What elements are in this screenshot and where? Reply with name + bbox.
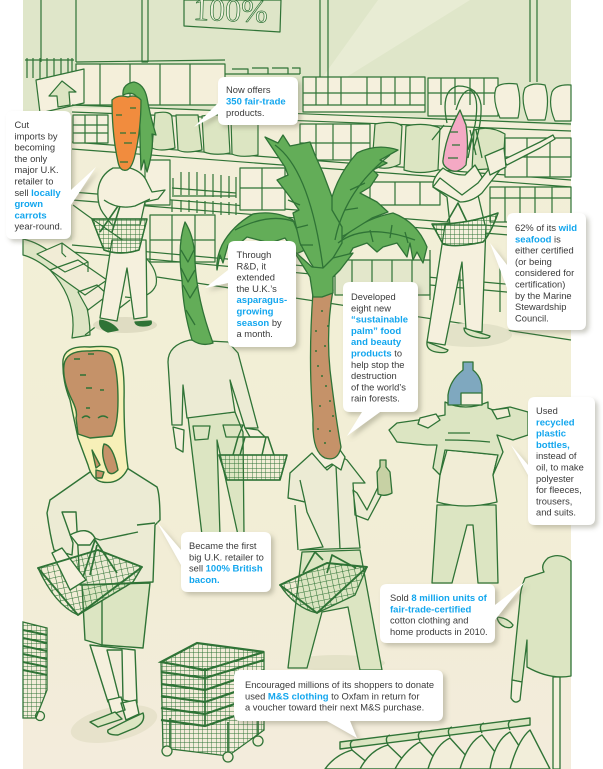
bacon head (63, 346, 128, 482)
shopper with recycled bottle head (389, 362, 528, 628)
upper left frond (265, 135, 342, 280)
basket (92, 219, 147, 253)
callout: fair-trade clothing: home products in 2010. (390, 627, 488, 637)
left arc frond (217, 213, 305, 270)
callout: carrots: the only (14, 154, 48, 164)
callout: wild seafood: seafood is (515, 234, 561, 245)
callout: recycled plastic bottles: polyester (536, 474, 574, 484)
fourth row (150, 215, 215, 262)
callout: fair-trade clothing: Sold 8 million units of (390, 593, 487, 604)
callout: wild seafood: considered for (515, 268, 574, 278)
callout: sustainable palm: destruction (351, 371, 397, 381)
callout: fair-trade clothing (380, 582, 525, 643)
callout: wild seafood: 62% of its wild (515, 223, 577, 234)
callout: recycled plastic bottles: trousers, (536, 496, 572, 506)
callout: carrots (6, 111, 96, 239)
top row boxes left (76, 60, 225, 105)
callout: sustainable palm: and beauty (351, 337, 402, 348)
top row boxes right (303, 77, 425, 112)
callout: British bacon: Became the first (189, 541, 257, 551)
callout: fair-trade products: 350 fair-trade (226, 96, 286, 108)
callout: sustainable palm: rain forests. (351, 394, 400, 404)
callout: asparagus: Through (236, 250, 271, 260)
callout: carrots: carrots (14, 210, 47, 221)
arrow sign (36, 69, 84, 113)
callout: sustainable palm: palm” food (351, 326, 401, 337)
callout: recycled plastic bottles: instead of (536, 451, 577, 461)
callout: sustainable palm: Developed (351, 292, 396, 302)
callout: recycled plastic bottles: recycled (536, 417, 575, 428)
shopper with bacon head (38, 346, 161, 750)
callout: wild seafood (490, 213, 586, 330)
callout: sustainable palm: “sustainable (351, 315, 408, 326)
callout: recycled plastic bottles: for fleeces, (536, 485, 582, 495)
shrimp head (443, 110, 468, 171)
frond base (293, 250, 353, 297)
callout: sustainable palm: eight new (351, 303, 391, 313)
upper right frond (328, 147, 398, 240)
callout: carrots: sell locally (14, 188, 61, 199)
callout: asparagus: asparagus- (236, 295, 287, 306)
basket (38, 550, 142, 615)
mannequin (511, 556, 571, 769)
callout: British bacon: big U.K. retailer to (189, 552, 264, 562)
callout: sustainable palm: products to (351, 348, 402, 360)
store shelves background (23, 0, 571, 340)
callout: M&S clothing: Encouraged millions of its shoppers to donate (245, 680, 434, 690)
callout: wild seafood: Stewardship (515, 302, 566, 312)
callout: carrots: grown (14, 199, 43, 210)
palm trunk and face (310, 290, 341, 459)
callout: recycled plastic bottles: bottles, (536, 440, 570, 451)
callout: M&S clothing (234, 670, 443, 738)
callout: sustainable palm (343, 282, 418, 436)
callout: asparagus: season by (236, 318, 282, 329)
callout: wild seafood: (or being (515, 257, 552, 267)
basket (280, 563, 367, 613)
callout: M&S clothing: used M&S clothing to Oxfam in return for (245, 691, 419, 702)
callout: recycled plastic bottles: oil, to make (536, 462, 584, 472)
shopper with asparagus head (168, 222, 287, 535)
carrot head (112, 96, 141, 170)
basket (432, 213, 498, 246)
callout: recycled plastic bottles (511, 397, 595, 525)
callout: fair-trade clothing: cotton clothing and (390, 616, 468, 626)
callout: carrots: becoming (14, 143, 55, 153)
callout: asparagus: extended (236, 273, 275, 283)
shelf boards (72, 105, 571, 298)
callout: fair-trade products: products. (226, 108, 264, 118)
callout: asparagus: growing (236, 306, 274, 318)
callout: asparagus: a month. (236, 329, 273, 339)
callout: fair-trade clothing: fair-trade-certified (390, 604, 471, 615)
shopper with shrimp head (427, 86, 555, 353)
callout: asparagus: R&D, it (236, 261, 266, 271)
callout: carrots: Cut (14, 120, 29, 130)
callout: sustainable palm: of the world’s (351, 382, 406, 392)
clothes rack (325, 718, 550, 769)
third row (145, 160, 285, 210)
callout: fair-trade products: Now offers (226, 85, 271, 95)
callout: British bacon: sell 100% British (189, 564, 263, 575)
callout: asparagus (205, 241, 296, 347)
palm fronds (217, 135, 427, 297)
right arc frond (327, 213, 427, 277)
shopper with carrot head (92, 82, 165, 333)
callout: wild seafood: certification) (515, 280, 565, 290)
callout: carrots: retailer to (14, 176, 53, 186)
basket stack left (23, 622, 47, 720)
callout: carrots: year-round. (14, 222, 62, 232)
callout: recycled plastic bottles: plastic (536, 429, 566, 440)
callout: British bacon: bacon. (189, 575, 220, 586)
callout: carrots: major U.K. (14, 165, 59, 175)
basket stack centre (161, 643, 264, 762)
shopper with palm tree head (217, 135, 427, 671)
callout: fair-trade products (194, 77, 298, 127)
callout: British bacon (157, 522, 271, 592)
basket (219, 455, 287, 480)
callout: wild seafood: Council. (515, 313, 549, 323)
escalator (23, 205, 156, 338)
bottle head (448, 362, 482, 405)
callout: recycled plastic bottles: and suits. (536, 508, 576, 518)
asparagus head (180, 222, 213, 344)
callout: asparagus: the U.K.’s (236, 284, 277, 294)
callout: sustainable palm: help stop the (351, 360, 405, 370)
callout: wild seafood: either certified (515, 246, 574, 256)
small bottle (377, 460, 392, 495)
callout: recycled plastic bottles: Used (536, 406, 558, 416)
second row jars and bags (73, 115, 108, 143)
carrot greens (123, 82, 156, 172)
callout: carrots: imports by (14, 131, 58, 141)
callout: M&S clothing: a voucher toward their next M&S purchase. (245, 703, 424, 713)
feelers (432, 86, 482, 158)
callout: wild seafood: by the Marine (515, 291, 572, 301)
